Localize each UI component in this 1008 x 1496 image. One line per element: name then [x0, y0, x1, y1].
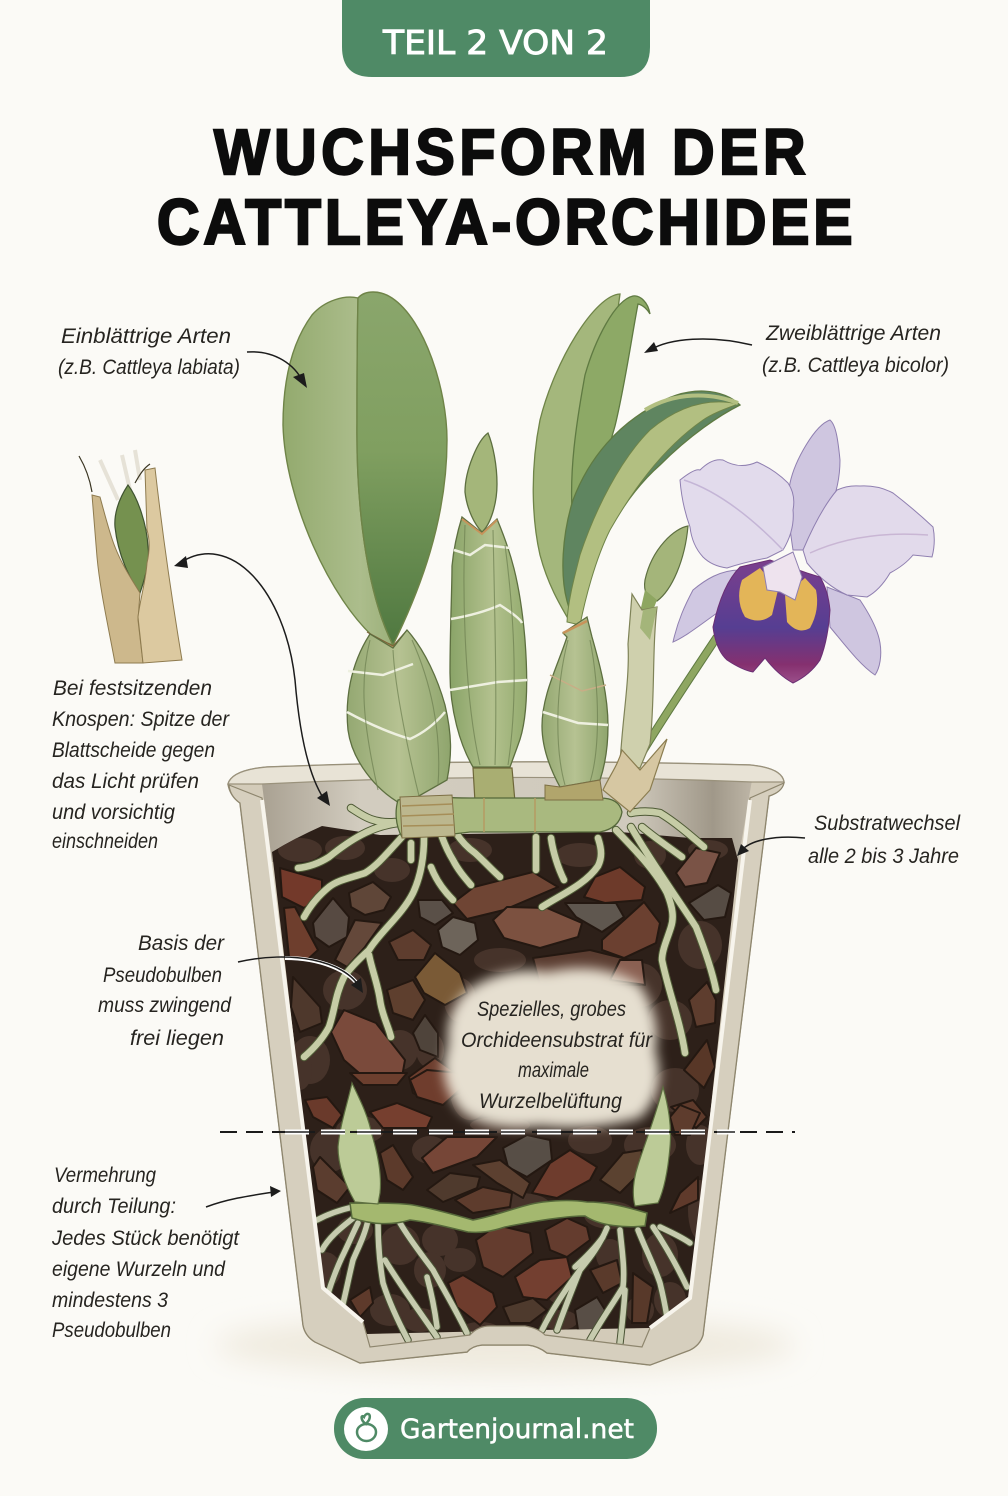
label: Vermehrung: Jedes Stück benötigt: [51, 1227, 240, 1250]
arrow: twin leaves: [644, 339, 752, 353]
arrow: substrate: [737, 837, 805, 856]
label: Vermehrung: durch Teilung:: [52, 1195, 176, 1218]
flower stem: [643, 637, 717, 751]
label: Basis der Pseudobulben: frei liegen: [130, 1027, 224, 1050]
pot shadow: [215, 1315, 795, 1375]
substrate clearing with label: maximale: [518, 1059, 589, 1082]
label: Basis der Pseudobulben: muss zwingend: [98, 994, 232, 1017]
arrow: pseudobulb base: [238, 957, 363, 993]
left pseudobulb: [347, 630, 451, 805]
label: Vermehrung: Vermehrung: [54, 1164, 156, 1187]
label: festsitzende Knospen: Bei festsitzenden: [53, 677, 212, 700]
label: Basis der Pseudobulben: Basis der: [138, 932, 225, 955]
title: CATTLEYA-ORCHIDEE: [157, 187, 853, 259]
filler gravel: [278, 836, 728, 1338]
lower divided plant: [317, 1083, 690, 1343]
pot back wall: [262, 777, 752, 862]
label: Vermehrung: mindestens 3: [52, 1289, 168, 1312]
footer badge: [334, 1398, 657, 1459]
substrate clearing with label: [444, 968, 659, 1128]
badge: Teil 2 von 2: [342, 0, 650, 77]
label: festsitzende Knospen: einschneiden: [52, 830, 158, 853]
pot outer shell: [228, 762, 784, 1365]
left petal: [680, 460, 794, 568]
label: Einblättrige Arten: (z.B. Cattleya labiata): [58, 356, 240, 379]
label: festsitzende Knospen: Knospen: Spitze der: [52, 708, 230, 731]
soil: [272, 826, 738, 1334]
flower: [673, 420, 934, 683]
arrow: single leaf: [247, 352, 307, 388]
top sepal: [788, 420, 840, 550]
inner highlight: [262, 800, 750, 1328]
label: Vermehrung: Pseudobulben: [52, 1319, 171, 1342]
lower rhizome: [350, 1200, 647, 1232]
label: festsitzende Knospen: [52, 677, 230, 853]
inset: bud in sheath: [79, 450, 182, 663]
roots: upper plant: [298, 808, 716, 1057]
lower shoot left: [338, 1083, 381, 1204]
centre shoot tip: [465, 433, 497, 532]
centre pseudobulb: [450, 517, 527, 767]
right petal: [803, 486, 934, 597]
lower shoot right: [633, 1087, 671, 1206]
substrate clearing with label: Orchideensubstrat für: [461, 1029, 653, 1052]
lower right sepal: [827, 587, 881, 675]
column: [763, 552, 802, 600]
rhizome: [396, 780, 622, 838]
arrow: inset to pot: [174, 554, 330, 806]
label: Basis der Pseudobulben: [98, 932, 232, 1050]
label: Einblättrige Arten: Einblättrige Arten: [61, 325, 231, 348]
rim: [228, 762, 784, 784]
flower sheath and bud: [603, 526, 688, 812]
substrate clearing with label: Spezielles, grobes: [477, 998, 626, 1021]
logo icon: [344, 1407, 388, 1451]
plant: upper orchid: [283, 292, 740, 838]
lower roots: [317, 1207, 690, 1343]
label: Substratwechsel: [808, 812, 961, 868]
label: Vermehrung: [51, 1164, 240, 1342]
pot front cut walls: [228, 762, 784, 1365]
lip: [713, 560, 830, 683]
label: Basis der Pseudobulben: Pseudobulben: [103, 964, 222, 987]
label: festsitzende Knospen: das Licht prüfen: [52, 770, 199, 793]
label: festsitzende Knospen: Blattscheide gegen: [52, 739, 215, 762]
label: Zweiblättrige Arten: [762, 322, 949, 377]
title: [157, 117, 853, 259]
footer badge: Gartenjournal.net: [400, 1414, 634, 1445]
label: festsitzende Knospen: und vorsichtig: [52, 801, 175, 824]
label: Einblättrige Arten: [58, 325, 240, 379]
stones: [280, 848, 731, 1333]
label: Zweiblättrige Arten: (z.B. Cattleya bicolor): [762, 354, 949, 377]
title: WUCHSFORM DER: [214, 117, 806, 189]
label: Substratwechsel: Substratwechsel: [814, 812, 961, 835]
pot: back wall and soil: [215, 762, 795, 1375]
label: Vermehrung: eigene Wurzeln und: [52, 1258, 226, 1281]
substrate clearing with label: Wurzelbelüftung: [479, 1090, 622, 1113]
arrow: division: [206, 1186, 281, 1207]
right pseudobulb: [542, 617, 608, 787]
twin leaves: [533, 294, 740, 625]
badge: Teil 2 von 2: TEIL 2 VON 2: [382, 23, 608, 62]
single leaf: [283, 292, 447, 652]
knot under centre bulb: [473, 768, 515, 802]
dashed division line: [220, 1131, 795, 1133]
label: Zweiblättrige Arten: Zweiblättrige Arten: [765, 322, 941, 345]
label: Substratwechsel: alle 2 bis 3 Jahre: [808, 845, 959, 868]
lower left sepal: [673, 570, 745, 642]
